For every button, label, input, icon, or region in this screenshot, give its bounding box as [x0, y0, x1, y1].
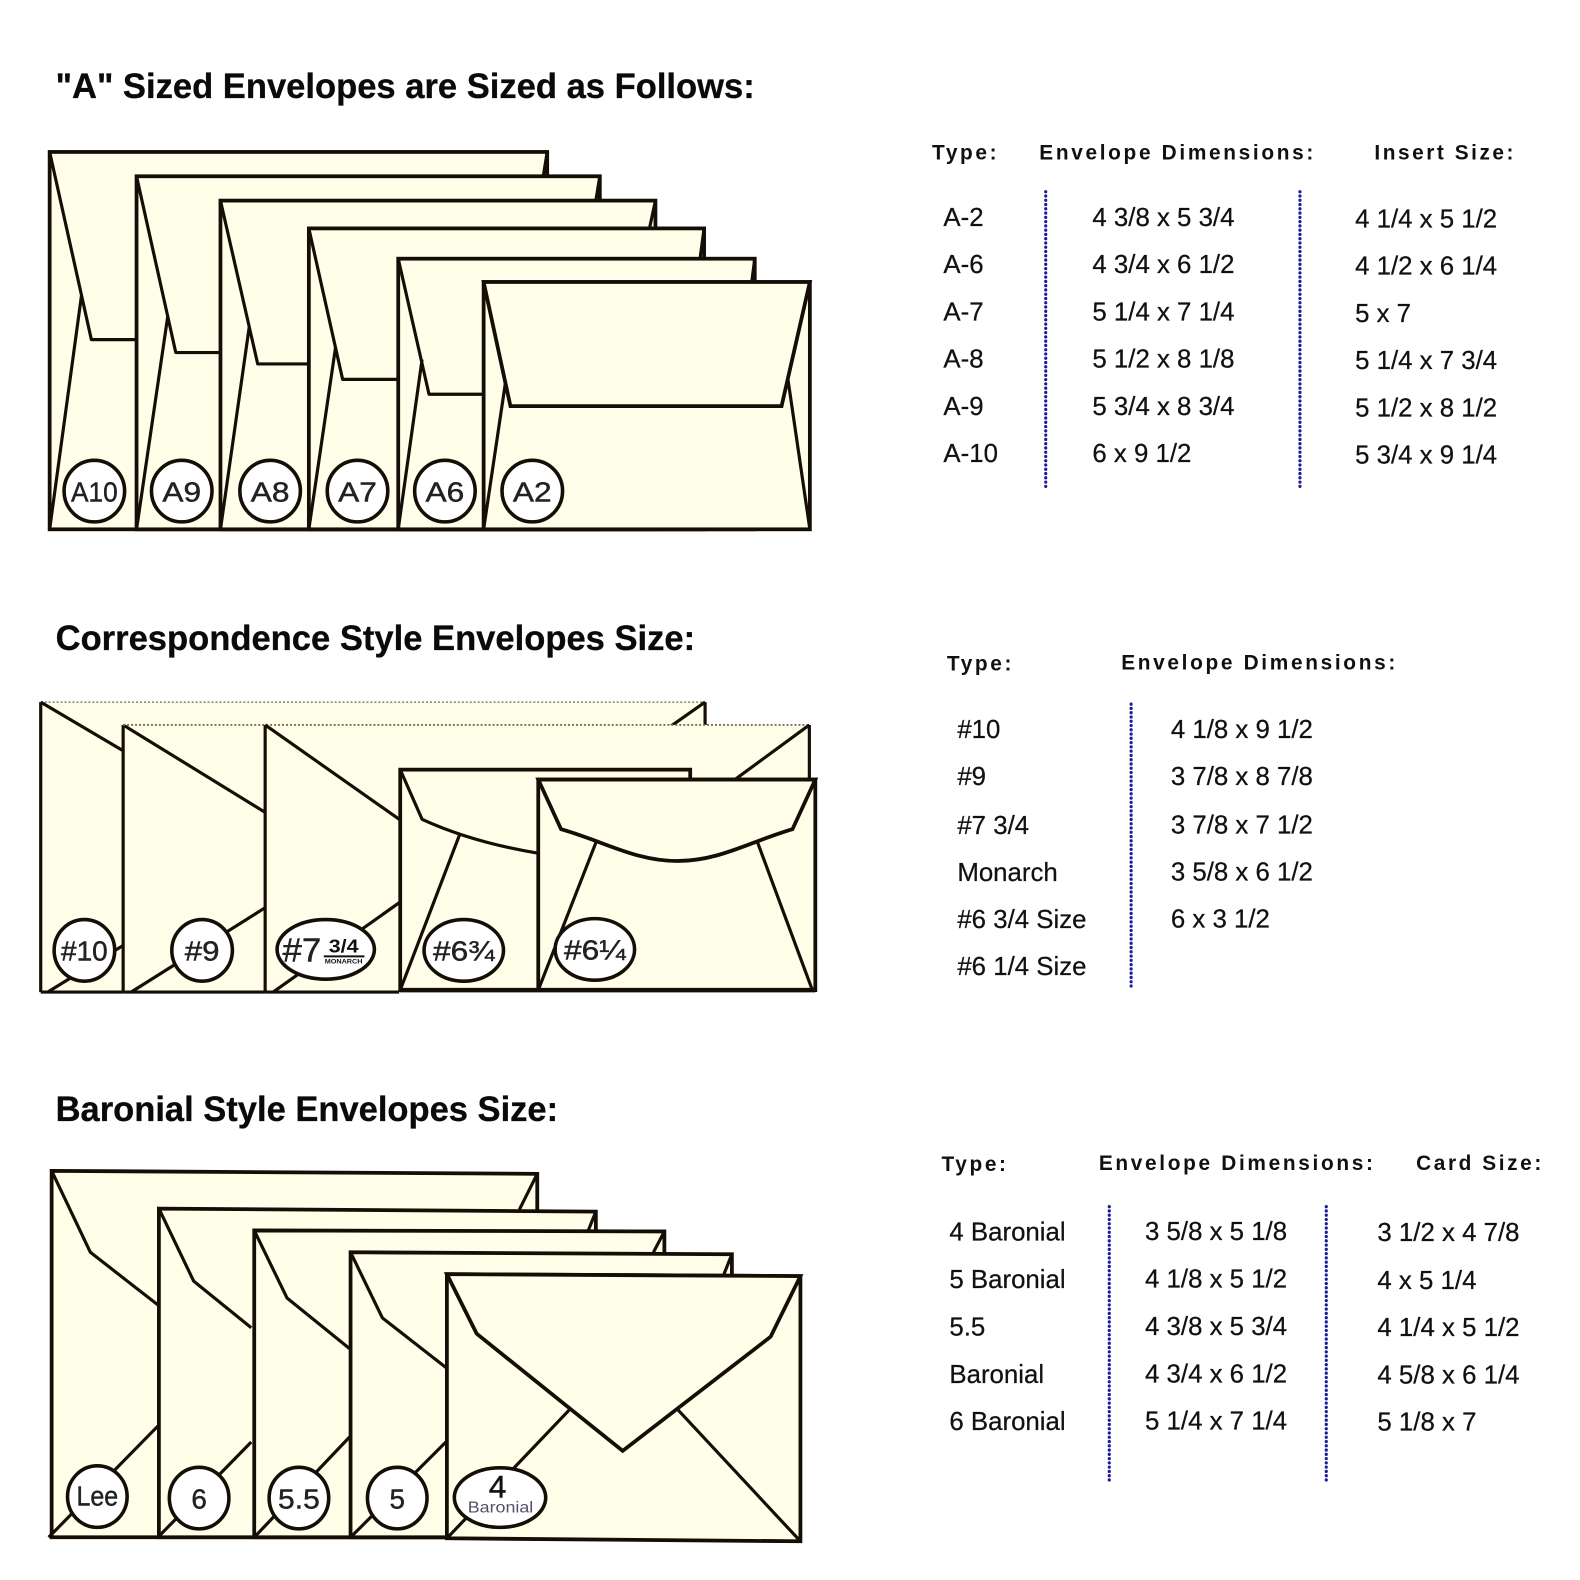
envelope #7 3/4 — [123, 725, 809, 992]
badge #6 3/4: #6¾ — [433, 935, 495, 966]
column: envelope dimensions: 3 7/8 x 7 1/2 — [1171, 812, 1313, 840]
badge A7: A7 — [338, 477, 377, 508]
envelope 4 — [447, 1274, 800, 1541]
column: envelope dimensions: 4 3/8 x 5 3/4 — [1145, 1313, 1287, 1341]
column: envelope dimensions: 4 3/4 x 6 1/2 — [1145, 1360, 1287, 1388]
envelope 5 — [351, 1252, 732, 1537]
table: A sized envelopes — [932, 141, 1513, 487]
badge #6 1/4 — [555, 919, 635, 980]
column: type — [957, 716, 1086, 981]
badge A6: A6 — [426, 477, 464, 508]
column: type: A-2 — [943, 204, 984, 232]
column: type: A-10 — [943, 440, 998, 468]
table header row: Insert Size: — [1374, 141, 1513, 164]
badge #10: #10 — [61, 935, 108, 966]
badge #10 — [54, 920, 115, 981]
envelope #10 — [41, 702, 705, 992]
table: baronial envelopes — [941, 1152, 1541, 1481]
table header row: Envelope Dimensions: — [1039, 141, 1313, 164]
column: insert size: 5 1/2 x 8 1/2 — [1355, 395, 1497, 423]
badge A2 — [502, 460, 563, 522]
divider — [1130, 704, 1133, 988]
envelope 6 — [158, 1209, 596, 1537]
column: type — [943, 204, 998, 468]
badge 4 Baronial: Baronial — [468, 1499, 533, 1516]
table header row: Envelope Dimensions: — [1099, 1152, 1373, 1175]
column: type: #10 — [957, 716, 1000, 744]
heading: correspondence style: Correspondence Style Envelopes Size: — [56, 620, 695, 658]
column: type: #7 3/4 — [957, 812, 1029, 840]
table header row: Type: — [932, 141, 997, 164]
column: insert size: 5 3/4 x 9 1/4 — [1355, 441, 1497, 469]
heading: A sized envelopes: "A" Sized Envelopes are Sized as Follows: — [56, 68, 755, 106]
column: insert size — [1355, 205, 1497, 469]
column: envelope dimensions: 5 1/2 x 8 1/8 — [1092, 345, 1234, 373]
badge 5: 5 — [390, 1483, 405, 1514]
envelope Lee — [49, 1171, 537, 1537]
envelope A10 — [50, 152, 547, 529]
divider — [1325, 1207, 1328, 1481]
envelope #6 1/4 — [538, 780, 815, 990]
column: type: A-6 — [943, 251, 984, 279]
envelope A6 — [398, 259, 755, 529]
column: card size: 3 1/2 x 4 7/8 — [1377, 1219, 1519, 1247]
divider — [1298, 192, 1302, 487]
column: type: 5.5 — [949, 1314, 985, 1342]
badge #7 3/4 Monarch: MONARCH — [325, 959, 362, 965]
badge #9 — [172, 920, 232, 981]
column: type: Baronial — [949, 1361, 1044, 1389]
badge A8 — [240, 460, 300, 522]
badge Lee — [68, 1466, 127, 1527]
envelope A7 — [309, 228, 704, 529]
envelope #9 — [123, 725, 265, 992]
column: type: #6 3/4 Size — [957, 906, 1086, 934]
table header row — [932, 141, 1513, 164]
column: envelope dimensions — [1145, 1218, 1287, 1436]
column: card size: 5 1/8 x 7 — [1377, 1409, 1476, 1437]
column: envelope dimensions: 6 x 9 1/2 — [1092, 440, 1191, 468]
badge 6 — [169, 1467, 229, 1529]
table header row: Card Size: — [1416, 1152, 1541, 1175]
column: envelope dimensions: 5 1/4 x 7 1/4 — [1145, 1408, 1287, 1436]
column: envelope dimensions: 3 7/8 x 8 7/8 — [1171, 763, 1313, 791]
divider — [1044, 192, 1047, 487]
badge A9: A9 — [162, 477, 201, 508]
column: type: 5 Baronial — [949, 1266, 1066, 1294]
column: type: A-7 — [943, 298, 984, 326]
column: card size — [1377, 1219, 1519, 1437]
illustration: correspondence envelopes — [41, 702, 815, 992]
badge Lee: Lee — [76, 1481, 118, 1512]
illustration: baronial envelopes — [49, 1171, 800, 1541]
envelope 5.5 — [254, 1230, 664, 1537]
badge 6: 6 — [191, 1483, 207, 1514]
envelope #6 3/4 — [400, 770, 690, 990]
badge A7 — [327, 460, 388, 522]
table: correspondence envelopes — [947, 651, 1395, 988]
column: envelope dimensions: 5 1/4 x 7 1/4 — [1092, 298, 1234, 326]
badge A6 — [415, 460, 475, 522]
table header row: Type: — [941, 1153, 1006, 1176]
column: type: A-9 — [943, 393, 984, 421]
column: type: #9 — [957, 763, 986, 791]
illustration: A sized envelopes — [50, 152, 810, 529]
table header row: Envelope Dimensions: — [1121, 651, 1395, 674]
column: card size: 4 5/8 x 6 1/4 — [1377, 1361, 1519, 1389]
badge A2: A2 — [513, 477, 552, 508]
column: type — [949, 1218, 1066, 1436]
badge #7 3/4 Monarch — [277, 920, 374, 979]
badge 4 Baronial — [454, 1468, 546, 1527]
heading: baronial style: Baronial Style Envelopes Size: — [56, 1091, 558, 1129]
column: type: 4 Baronial — [949, 1218, 1066, 1246]
badge #7 3/4 Monarch: 3/4 — [329, 935, 359, 956]
column: envelope dimensions: 5 3/4 x 8 3/4 — [1092, 393, 1234, 421]
column: insert size: 4 1/2 x 6 1/4 — [1355, 253, 1497, 281]
column: insert size: 5 x 7 — [1355, 300, 1411, 328]
column: envelope dimensions — [1171, 716, 1313, 934]
column: type: Monarch — [957, 859, 1058, 887]
badge #7 3/4 Monarch: #7 — [283, 931, 321, 969]
badge #9: #9 — [185, 935, 219, 966]
badge A10 — [64, 460, 125, 522]
badge A10: A10 — [71, 477, 118, 508]
column: type: #6 1/4 Size — [957, 953, 1086, 981]
table header row — [941, 1152, 1541, 1176]
badge #6 3/4 — [424, 920, 503, 981]
badge #6 1/4: #6¼ — [564, 934, 627, 965]
envelope A9 — [137, 176, 600, 529]
badge A8: A8 — [251, 477, 289, 508]
column: envelope dimensions: 3 5/8 x 5 1/8 — [1145, 1218, 1287, 1246]
envelope A2 — [484, 282, 810, 529]
badge 4 Baronial: 4 — [489, 1469, 506, 1505]
column: insert size: 5 1/4 x 7 3/4 — [1355, 347, 1497, 375]
badge A9 — [151, 460, 212, 522]
column: envelope dimensions — [1092, 204, 1234, 468]
column: card size: 4 1/4 x 5 1/2 — [1377, 1314, 1519, 1342]
divider — [1108, 1207, 1111, 1481]
column: envelope dimensions: 4 3/8 x 5 3/4 — [1092, 204, 1234, 232]
column: envelope dimensions: 6 x 3 1/2 — [1171, 906, 1270, 934]
column: type: A-8 — [943, 345, 984, 373]
badge 5.5 — [269, 1467, 329, 1529]
column: envelope dimensions: 4 3/4 x 6 1/2 — [1092, 251, 1234, 279]
column: insert size: 4 1/4 x 5 1/2 — [1355, 205, 1497, 233]
badge 5 — [367, 1467, 427, 1529]
table header row — [947, 651, 1395, 675]
table header row: Type: — [947, 652, 1011, 675]
column: envelope dimensions: 3 5/8 x 6 1/2 — [1171, 858, 1313, 886]
column: card size: 4 x 5 1/4 — [1377, 1267, 1476, 1295]
column: envelope dimensions: 4 1/8 x 9 1/2 — [1171, 716, 1313, 744]
badge 5.5: 5.5 — [278, 1483, 320, 1514]
column: envelope dimensions: 4 1/8 x 5 1/2 — [1145, 1266, 1287, 1294]
column: type: 6 Baronial — [949, 1408, 1066, 1436]
envelope A8 — [220, 201, 655, 529]
